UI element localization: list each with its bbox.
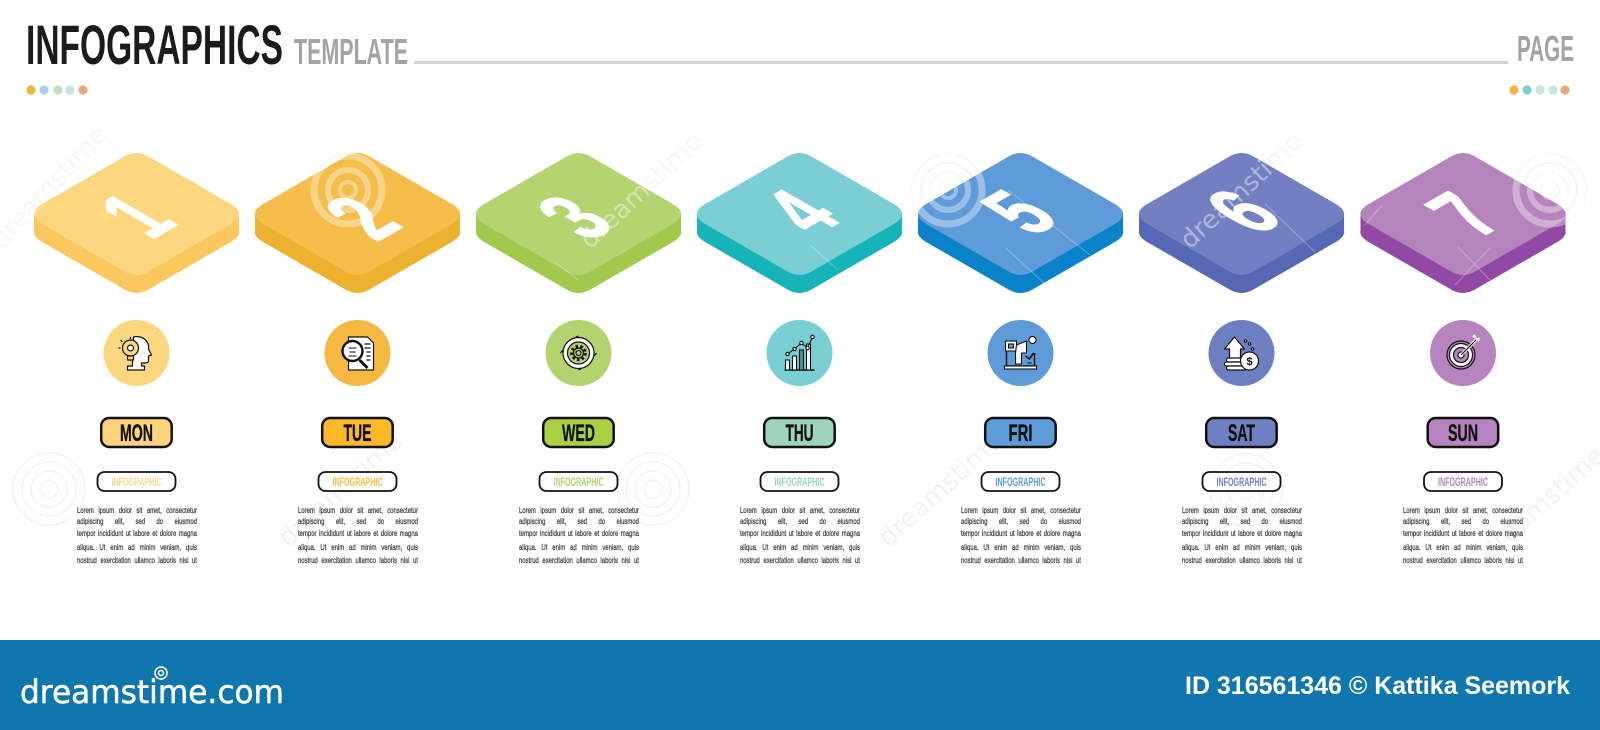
description text: nostrud exercitation ullamco laboris nisi ut	[960, 555, 1080, 565]
isometric tile 2	[255, 153, 460, 293]
day label	[543, 418, 614, 447]
description text: aliqua. Ut enim ad minim veniam, quis	[518, 542, 638, 552]
description text: nostrud exercitation ullamco laboris nisi ut	[518, 555, 638, 565]
description text: aliqua. Ut enim ad minim veniam, quis	[1182, 542, 1301, 552]
description text: Lorem ipsum dolor sit amet, consectetur	[1403, 505, 1523, 515]
description text	[960, 500, 1082, 570]
circle icon: growth arrow and coin	[1208, 320, 1274, 386]
description text	[76, 500, 198, 570]
infographic tag	[540, 472, 618, 491]
description text	[518, 500, 640, 570]
description text: Lorem ipsum dolor sit amet, consectetur	[76, 505, 196, 515]
isometric tile 1	[34, 153, 239, 293]
panel: step 2 Tuesday	[255, 153, 460, 570]
day label: FRI	[1008, 420, 1032, 447]
infographic tag: INFOGRAPHIC	[1438, 477, 1488, 489]
day label: THU	[786, 420, 814, 447]
infographic tag	[98, 472, 176, 491]
isometric tile 1: 1	[76, 181, 197, 250]
description text: nostrud exercitation ullamco laboris nisi ut	[298, 555, 417, 565]
description text: aliqua. Ut enim ad minim veniam, quis	[960, 542, 1080, 552]
description text: tempor incididunt ut labore et dolore magna	[76, 528, 196, 538]
description text: nostrud exercitation ullamco laboris nisi ut	[76, 555, 196, 565]
description text	[1182, 500, 1304, 570]
day label	[322, 418, 393, 447]
isometric tile 2: 2	[301, 183, 422, 252]
description text: Lorem ipsum dolor sit amet, consectetur	[960, 505, 1080, 515]
infographic tag: INFOGRAPHIC	[112, 477, 162, 489]
day label	[764, 418, 835, 447]
footer credit: ID 316561346 © Kattika Seemork	[1185, 672, 1570, 700]
description text: adipiscing elit, sed do eiusmod	[1182, 516, 1301, 526]
infographic tag	[760, 472, 838, 491]
infographic tag	[318, 472, 396, 491]
isometric tile 5: 5	[958, 177, 1079, 247]
isometric tile 6: 6	[1182, 176, 1303, 246]
day label	[101, 418, 172, 447]
panel: step 1 Monday	[34, 153, 239, 570]
infographic tag: INFOGRAPHIC	[996, 477, 1046, 489]
day label: SUN	[1448, 420, 1478, 447]
faint watermarks on white: dreamstime	[1174, 127, 1309, 255]
day label	[1428, 418, 1498, 447]
isometric tile 5	[918, 153, 1123, 293]
isometric tile 6	[1139, 153, 1344, 293]
description text	[298, 500, 420, 570]
description text: Lorem ipsum dolor sit amet, consectetur	[1182, 505, 1301, 515]
description text: tempor incididunt ut labore et dolore magna	[298, 528, 417, 538]
isometric tile 3: 3	[514, 182, 635, 252]
isometric tile 7: 7	[1404, 179, 1525, 249]
faint watermarks on white: dreamstime	[873, 426, 1009, 553]
faint watermarks on white: dreamstime	[273, 426, 409, 553]
description text: nostrud exercitation ullamco laboris nisi ut	[740, 555, 859, 565]
day label: WED	[562, 420, 595, 447]
watermark overlay on tiles	[0, 120, 1584, 285]
infographic tag: INFOGRAPHIC	[1216, 477, 1266, 489]
description text: tempor incididunt ut labore et dolore magna	[1403, 528, 1523, 538]
description text: Lorem ipsum dolor sit amet, consectetur	[740, 505, 859, 515]
description text: aliqua. Ut enim ad minim veniam, quis	[298, 542, 417, 552]
footer band	[0, 640, 1600, 730]
description text: adipiscing elit, sed do eiusmod	[740, 516, 859, 526]
day label	[985, 418, 1056, 447]
description text: adipiscing elit, sed do eiusmod	[1403, 516, 1523, 526]
watermark overlay on tiles: dreamstime	[1174, 127, 1309, 255]
faint watermarks on white	[0, 120, 1600, 567]
infographic tag: INFOGRAPHIC	[554, 477, 604, 489]
title: TEMPLATE	[294, 31, 408, 72]
panel: step 6 Saturday	[1139, 153, 1344, 570]
circle icon: head with light bulb	[104, 320, 170, 386]
description text: tempor incididunt ut labore et dolore magna	[518, 528, 638, 538]
infographic tag: INFOGRAPHIC	[774, 477, 824, 489]
isometric tile 4: 4	[740, 177, 861, 246]
description text: tempor incididunt ut labore et dolore magna	[960, 528, 1080, 538]
description text: nostrud exercitation ullamco laboris nisi ut	[1403, 555, 1523, 565]
watermark overlay on tiles: dreamstime	[574, 127, 709, 255]
circle icon: laptop presentation	[988, 320, 1054, 386]
description text: Lorem ipsum dolor sit amet, consectetur	[298, 505, 417, 515]
description text	[740, 500, 862, 570]
infographic tag	[982, 472, 1060, 491]
description text: adipiscing elit, sed do eiusmod	[76, 516, 196, 526]
description text: adipiscing elit, sed do eiusmod	[518, 516, 638, 526]
title: INFOGRAPHICS	[26, 13, 283, 76]
footer logo: dreamstime.com	[20, 673, 284, 711]
circle icon: growth arrow and coin: $	[1246, 356, 1253, 368]
panel: step 3 Wednesday	[476, 153, 681, 570]
isometric tile 3	[476, 153, 681, 293]
isometric tile 7	[1360, 153, 1566, 293]
description text: aliqua. Ut enim ad minim veniam, quis	[76, 542, 196, 552]
day label: MON	[120, 420, 153, 447]
description text: aliqua. Ut enim ad minim veniam, quis	[1403, 542, 1523, 552]
circle icon: bar chart	[766, 320, 832, 386]
faint watermarks on white: dreamstime	[574, 127, 709, 255]
circle icon: target with arrow	[1430, 320, 1496, 386]
panel: step 7 Sunday	[1360, 153, 1566, 570]
panel: step 5 Friday	[918, 153, 1123, 570]
day label: TUE	[344, 420, 372, 447]
day label	[1206, 418, 1277, 447]
description text: Lorem ipsum dolor sit amet, consectetur	[518, 505, 638, 515]
description text: tempor incididunt ut labore et dolore magna	[740, 528, 859, 538]
description text: aliqua. Ut enim ad minim veniam, quis	[740, 542, 859, 552]
description text	[1403, 500, 1525, 570]
description text: nostrud exercitation ullamco laboris nisi ut	[1182, 555, 1301, 565]
infographic tag: INFOGRAPHIC	[332, 477, 382, 489]
circle icon: gear cycle	[546, 320, 612, 386]
panel: step 4 Thursday	[697, 153, 902, 570]
decorative dots right	[1509, 85, 1570, 95]
description text: tempor incididunt ut labore et dolore magna	[1182, 528, 1301, 538]
day label: SAT	[1228, 420, 1255, 447]
decorative dots left	[26, 85, 88, 95]
description text: adipiscing elit, sed do eiusmod	[960, 516, 1080, 526]
infographic tag	[1424, 472, 1502, 491]
isometric tile 4	[697, 153, 902, 293]
description text: adipiscing elit, sed do eiusmod	[298, 516, 417, 526]
infographic tag	[1202, 472, 1280, 491]
circle icon: document with magnifier	[324, 320, 390, 386]
